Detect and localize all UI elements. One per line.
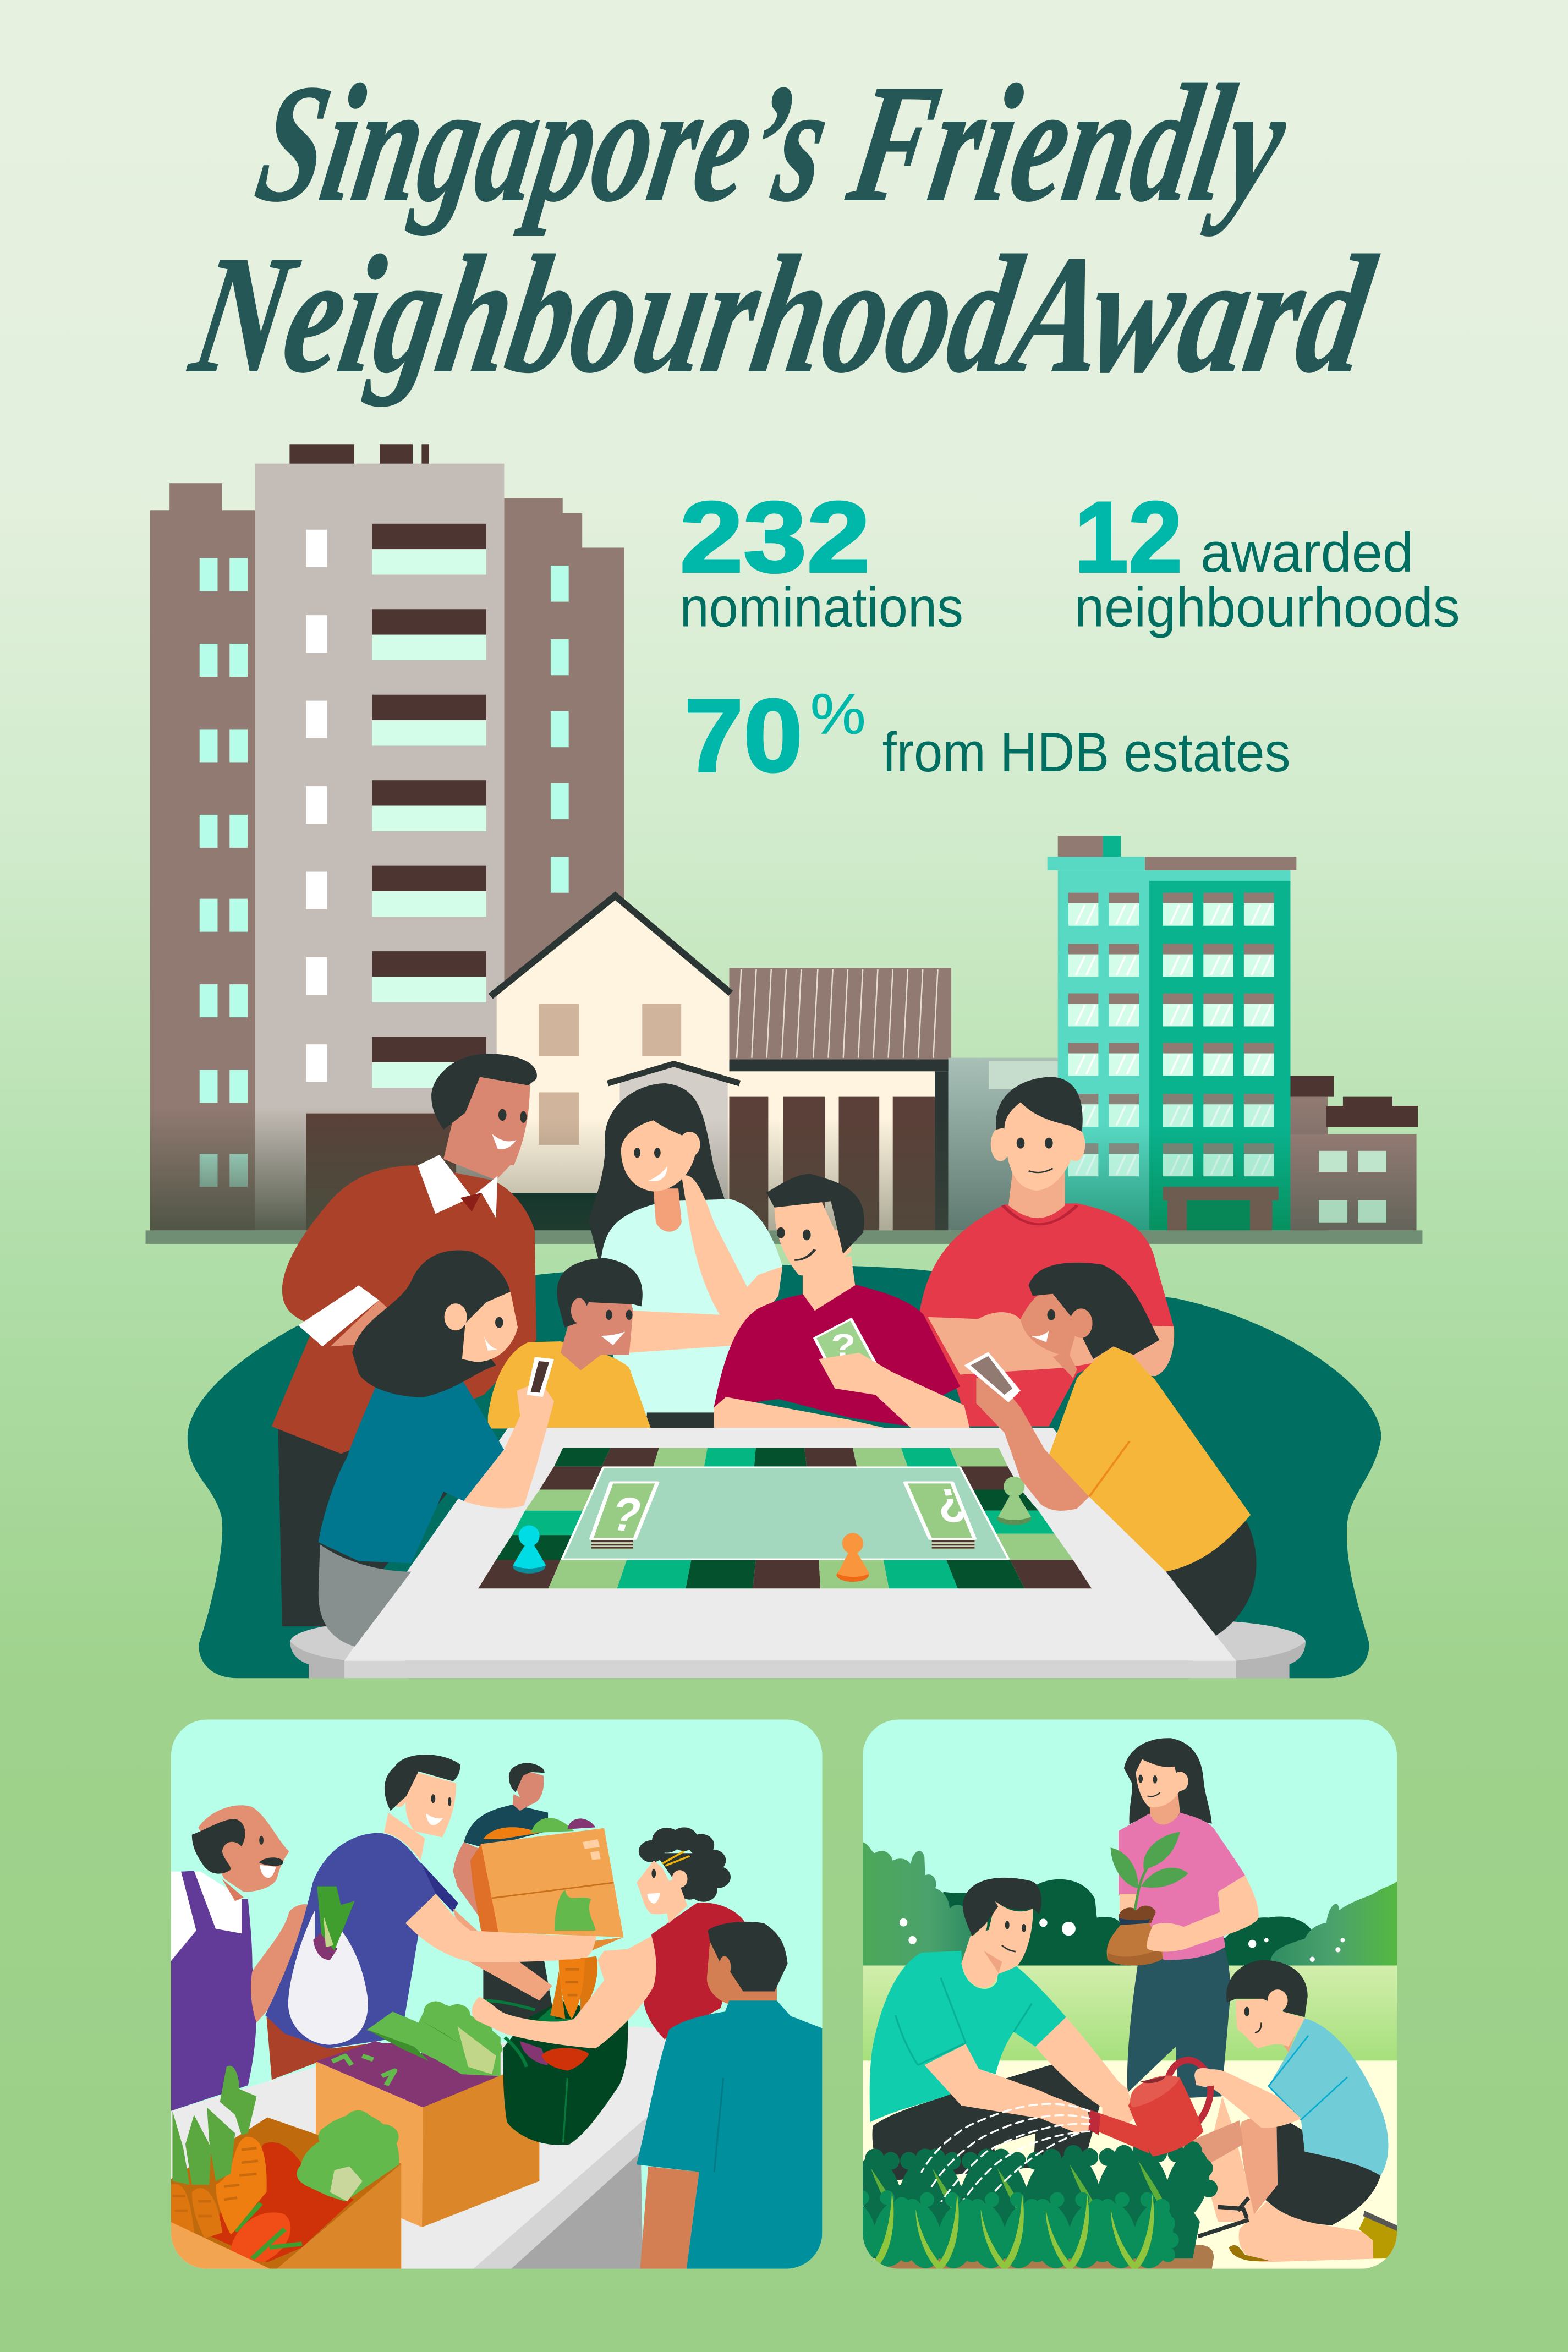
question cards: ? xyxy=(605,1487,647,1542)
question cards: ? xyxy=(930,1478,972,1533)
stat: 70% from HDB estates: % xyxy=(810,682,866,746)
person: man in maroon polo xyxy=(714,1174,970,1428)
panel: market scene xyxy=(171,1719,823,2272)
stat: 232 nominations: nominations xyxy=(679,577,963,639)
stat: 12 awarded neighbourhoods xyxy=(1074,481,1460,639)
market counter xyxy=(171,2026,669,2272)
curly hair xyxy=(639,1827,731,1902)
building: small brown block xyxy=(1290,1076,1418,1230)
depth fade over towers xyxy=(150,1108,504,1230)
front spinach plants xyxy=(830,2190,1179,2272)
stat: 232 nominations: 232 xyxy=(679,481,870,593)
left bush xyxy=(863,1842,972,1966)
stools xyxy=(290,1620,1306,1678)
panel: community garden scene xyxy=(830,1719,1397,2272)
buildings skyline xyxy=(146,444,1422,1244)
person: boy in blue t-shirt xyxy=(1178,1960,1397,2262)
lawn xyxy=(863,1966,1397,2060)
person: man in teal shirt (foreground) xyxy=(637,1922,822,2272)
title: Neighbourhood xyxy=(179,221,1034,407)
building: grey blue annex xyxy=(949,1058,1058,1230)
stat: 12 awarded neighbourhoods: neighbourhoods xyxy=(1074,577,1460,639)
building: left block windows xyxy=(200,558,569,1187)
stat: 232 nominations xyxy=(679,481,963,639)
person: woman in teal t-shirt xyxy=(319,1251,554,1647)
building: left brown block xyxy=(150,483,624,1230)
person: woman in mint t-shirt xyxy=(589,1083,782,1429)
red watering can xyxy=(1089,2060,1219,2157)
person: woman in red top, torso and head xyxy=(637,1827,744,2040)
person: boy in yellow t-shirt xyxy=(488,1258,651,1428)
title xyxy=(179,50,1386,407)
building: cream house xyxy=(491,896,740,1230)
pawns xyxy=(513,1477,1031,1582)
title: Singapore’s xyxy=(245,50,841,237)
main scene: neighbours playing a board game xyxy=(188,1054,1381,1678)
water spray xyxy=(922,2104,1090,2233)
board game table xyxy=(344,1428,1236,1678)
green sofa backdrop xyxy=(188,1265,1381,1678)
stat: 70% from HDB estates: from HDB estates xyxy=(882,722,1290,783)
person: woman in yellow t-shirt xyxy=(964,1263,1256,1636)
green tote bag xyxy=(483,1997,628,2145)
carrots in hand xyxy=(550,1890,597,2019)
building: central grey tower xyxy=(255,444,504,1230)
front produce crate xyxy=(171,2066,401,2272)
building: teal apartment xyxy=(1048,836,1296,1230)
stat: 12 awarded neighbourhoods: 12 xyxy=(1074,481,1182,593)
soil bed xyxy=(875,2245,1214,2272)
building: striped roof hall xyxy=(728,968,951,1230)
garden path xyxy=(863,2060,1397,2271)
potted plant xyxy=(1107,1832,1188,1965)
stat: 70% from HDB estates xyxy=(684,678,1290,793)
flowers xyxy=(900,1918,1345,1962)
stat: 12 awarded neighbourhoods: awarded xyxy=(1200,522,1413,584)
stat: 70% from HDB estates: 70 xyxy=(684,678,803,793)
person: man in green t-shirt xyxy=(870,1878,1135,2181)
white plastic bag with leek xyxy=(288,1887,368,2045)
arm of woman in red top xyxy=(472,1936,656,2048)
depth fade over house and hall xyxy=(497,1118,949,1230)
middle produce crate xyxy=(316,2002,539,2227)
ground strip xyxy=(146,1230,1422,1244)
title: Friendly xyxy=(836,50,1300,237)
dark hedge xyxy=(943,1879,1323,1966)
person: background man with box xyxy=(453,1763,623,2019)
title: Award xyxy=(990,221,1386,407)
game board border squares xyxy=(478,1448,1092,1588)
person: woman holding plant xyxy=(1107,1738,1259,2098)
person: man in red t-shirt xyxy=(920,1077,1174,1427)
back spinach plants xyxy=(849,2141,1218,2258)
right bush xyxy=(1270,1881,1397,1966)
person: man in brown sweater xyxy=(272,1054,537,1626)
person: man in maroon polo: ? xyxy=(831,1328,856,1364)
question cards xyxy=(591,1478,974,1549)
person: man in blue t-shirt xyxy=(265,1755,596,2080)
person: older man in purple apron xyxy=(171,1805,308,2111)
